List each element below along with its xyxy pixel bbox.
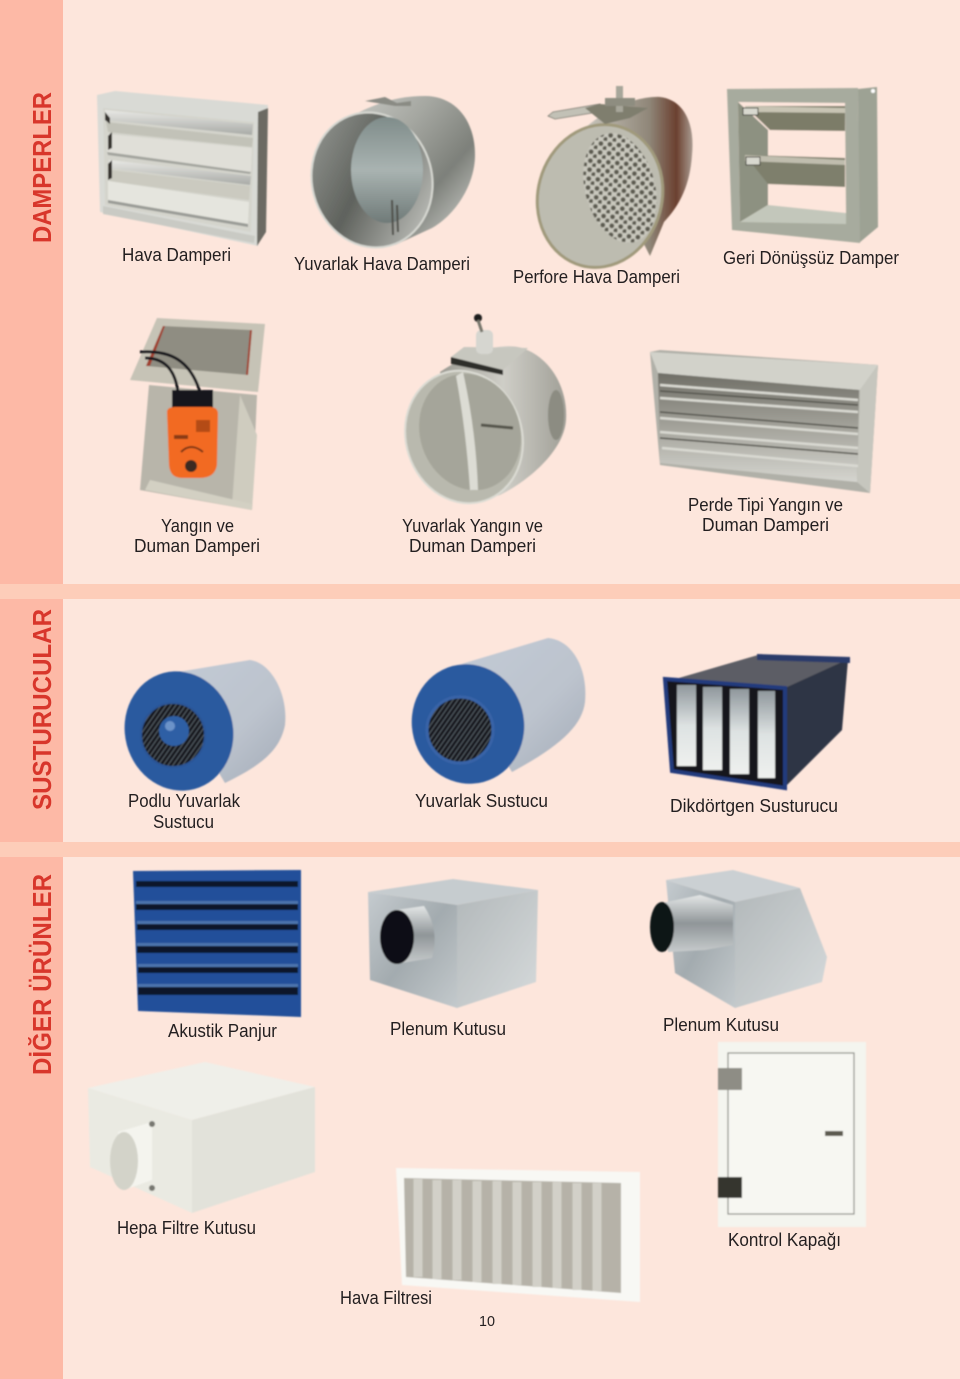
actuator housing [172, 390, 213, 414]
label: Perde Tipi Yangın ve Duman Damperi [688, 495, 843, 535]
page number: 10 [479, 1313, 495, 1330]
icon: Plenum Kutusu side connector [368, 879, 538, 1008]
icon: Kontrol Kapağı access door [718, 1042, 866, 1227]
icon: Akustik Panjur blue louvre [133, 870, 301, 1017]
icon: Yangın ve Duman Damperi with actuator [130, 318, 265, 510]
icon: Yuvarlak Yangın ve Duman Damperi [388, 314, 566, 519]
icon: Geri Dönüşsüz Damper backdraft damper [727, 87, 878, 243]
label: Yuvarlak Yangın ve Duman Damperi [402, 516, 543, 556]
mounting box [451, 347, 528, 370]
icon: Plenum Kutusu sloped [650, 870, 827, 1008]
label: Geri Dönüşsüz Damper: Geri Dönüşsüz Damper [723, 248, 899, 268]
icon: Podlu Yuvarlak Sustucu [111, 659, 285, 803]
damper blade [351, 117, 423, 223]
handle [548, 104, 600, 119]
label: Podlu Yuvarlak Sustucu: Sustucu [153, 812, 214, 832]
label: Perde Tipi Yangın ve Duman Damperi: Perde Tipi Yangın ve [688, 495, 843, 515]
damper rod [392, 200, 398, 235]
label: Podlu Yuvarlak Sustucu [128, 791, 241, 832]
icon: Perfore Hava Damperi perforated damper [521, 86, 693, 282]
opening [141, 703, 205, 767]
collar [396, 906, 435, 964]
actuator orange body [167, 407, 218, 478]
icon: Perde Tipi curtain fire damper [650, 350, 878, 493]
label: Yuvarlak Yangın ve Duman Damperi: Yuvarlak Yangın ve [402, 516, 543, 536]
label: Yangın ve Duman Damperi: Yangın ve [161, 516, 234, 536]
side patch [548, 390, 564, 440]
icon: Yuvarlak Sustucu [398, 638, 585, 796]
icon: Hava Filtresi panel [396, 1168, 640, 1302]
label: Yuvarlak Sustucu: Yuvarlak Sustucu [415, 791, 548, 811]
pipe [662, 895, 733, 952]
baffles [677, 685, 696, 766]
connector [118, 1122, 152, 1190]
icon: Hepa Filtre Kutusu [88, 1062, 315, 1213]
icon: Dikdörtgen Susturucu [665, 654, 850, 788]
label: Podlu Yuvarlak Sustucu: Podlu Yuvarlak [128, 791, 241, 811]
label: Plenum Kutusu (right): Plenum Kutusu [663, 1015, 779, 1035]
handle [825, 1131, 843, 1136]
hinge top [718, 1068, 742, 1090]
label: Yangın ve Duman Damperi [134, 516, 260, 556]
divider band: lower [0, 842, 960, 857]
section heading: DAMPERLER: DAMPERLER [27, 92, 57, 243]
knob and handle [476, 330, 493, 354]
section heading: DİĞER ÜRÜNLER: DİĞER ÜRÜNLER [27, 874, 57, 1075]
divider band: upper [0, 584, 960, 599]
blade [456, 372, 478, 490]
label: Yangın ve Duman Damperi: Duman Damperi [134, 536, 260, 556]
label: Hepa Filtre Kutusu: Hepa Filtre Kutusu [117, 1218, 256, 1238]
label: Plenum Kutusu (left): Plenum Kutusu [390, 1019, 506, 1039]
label: Hava Filtresi: Hava Filtresi [340, 1288, 432, 1308]
opening [427, 697, 493, 763]
perforated blade [572, 125, 668, 251]
icon: Hava Damperi louvre damper [97, 91, 268, 246]
pod [159, 716, 189, 746]
label: Hava Damperi: Hava Damperi [122, 245, 231, 265]
label: Perfore Hava Damperi: Perfore Hava Damperi [513, 267, 680, 287]
label: Akustik Panjur: Akustik Panjur [168, 1021, 277, 1041]
label: Yuvarlak Hava Damperi: Yuvarlak Hava Damperi [294, 254, 470, 274]
icon: Yuvarlak Hava Damperi round damper [296, 96, 475, 261]
label: Yuvarlak Yangın ve Duman Damperi: Duman Damperi [409, 536, 536, 556]
section heading: SUSTURUCULAR: SUSTURUCULAR [27, 609, 57, 810]
cables [140, 352, 200, 392]
sidebar: category column [0, 0, 63, 1379]
hinge bottom [718, 1177, 742, 1198]
label: Perde Tipi Yangın ve Duman Damperi: Duman Damperi [702, 515, 829, 535]
label: Dikdörtgen Susturucu: Dikdörtgen Susturucu [670, 796, 838, 816]
handle [365, 97, 411, 106]
label: Kontrol Kapağı: Kontrol Kapağı [728, 1230, 841, 1250]
